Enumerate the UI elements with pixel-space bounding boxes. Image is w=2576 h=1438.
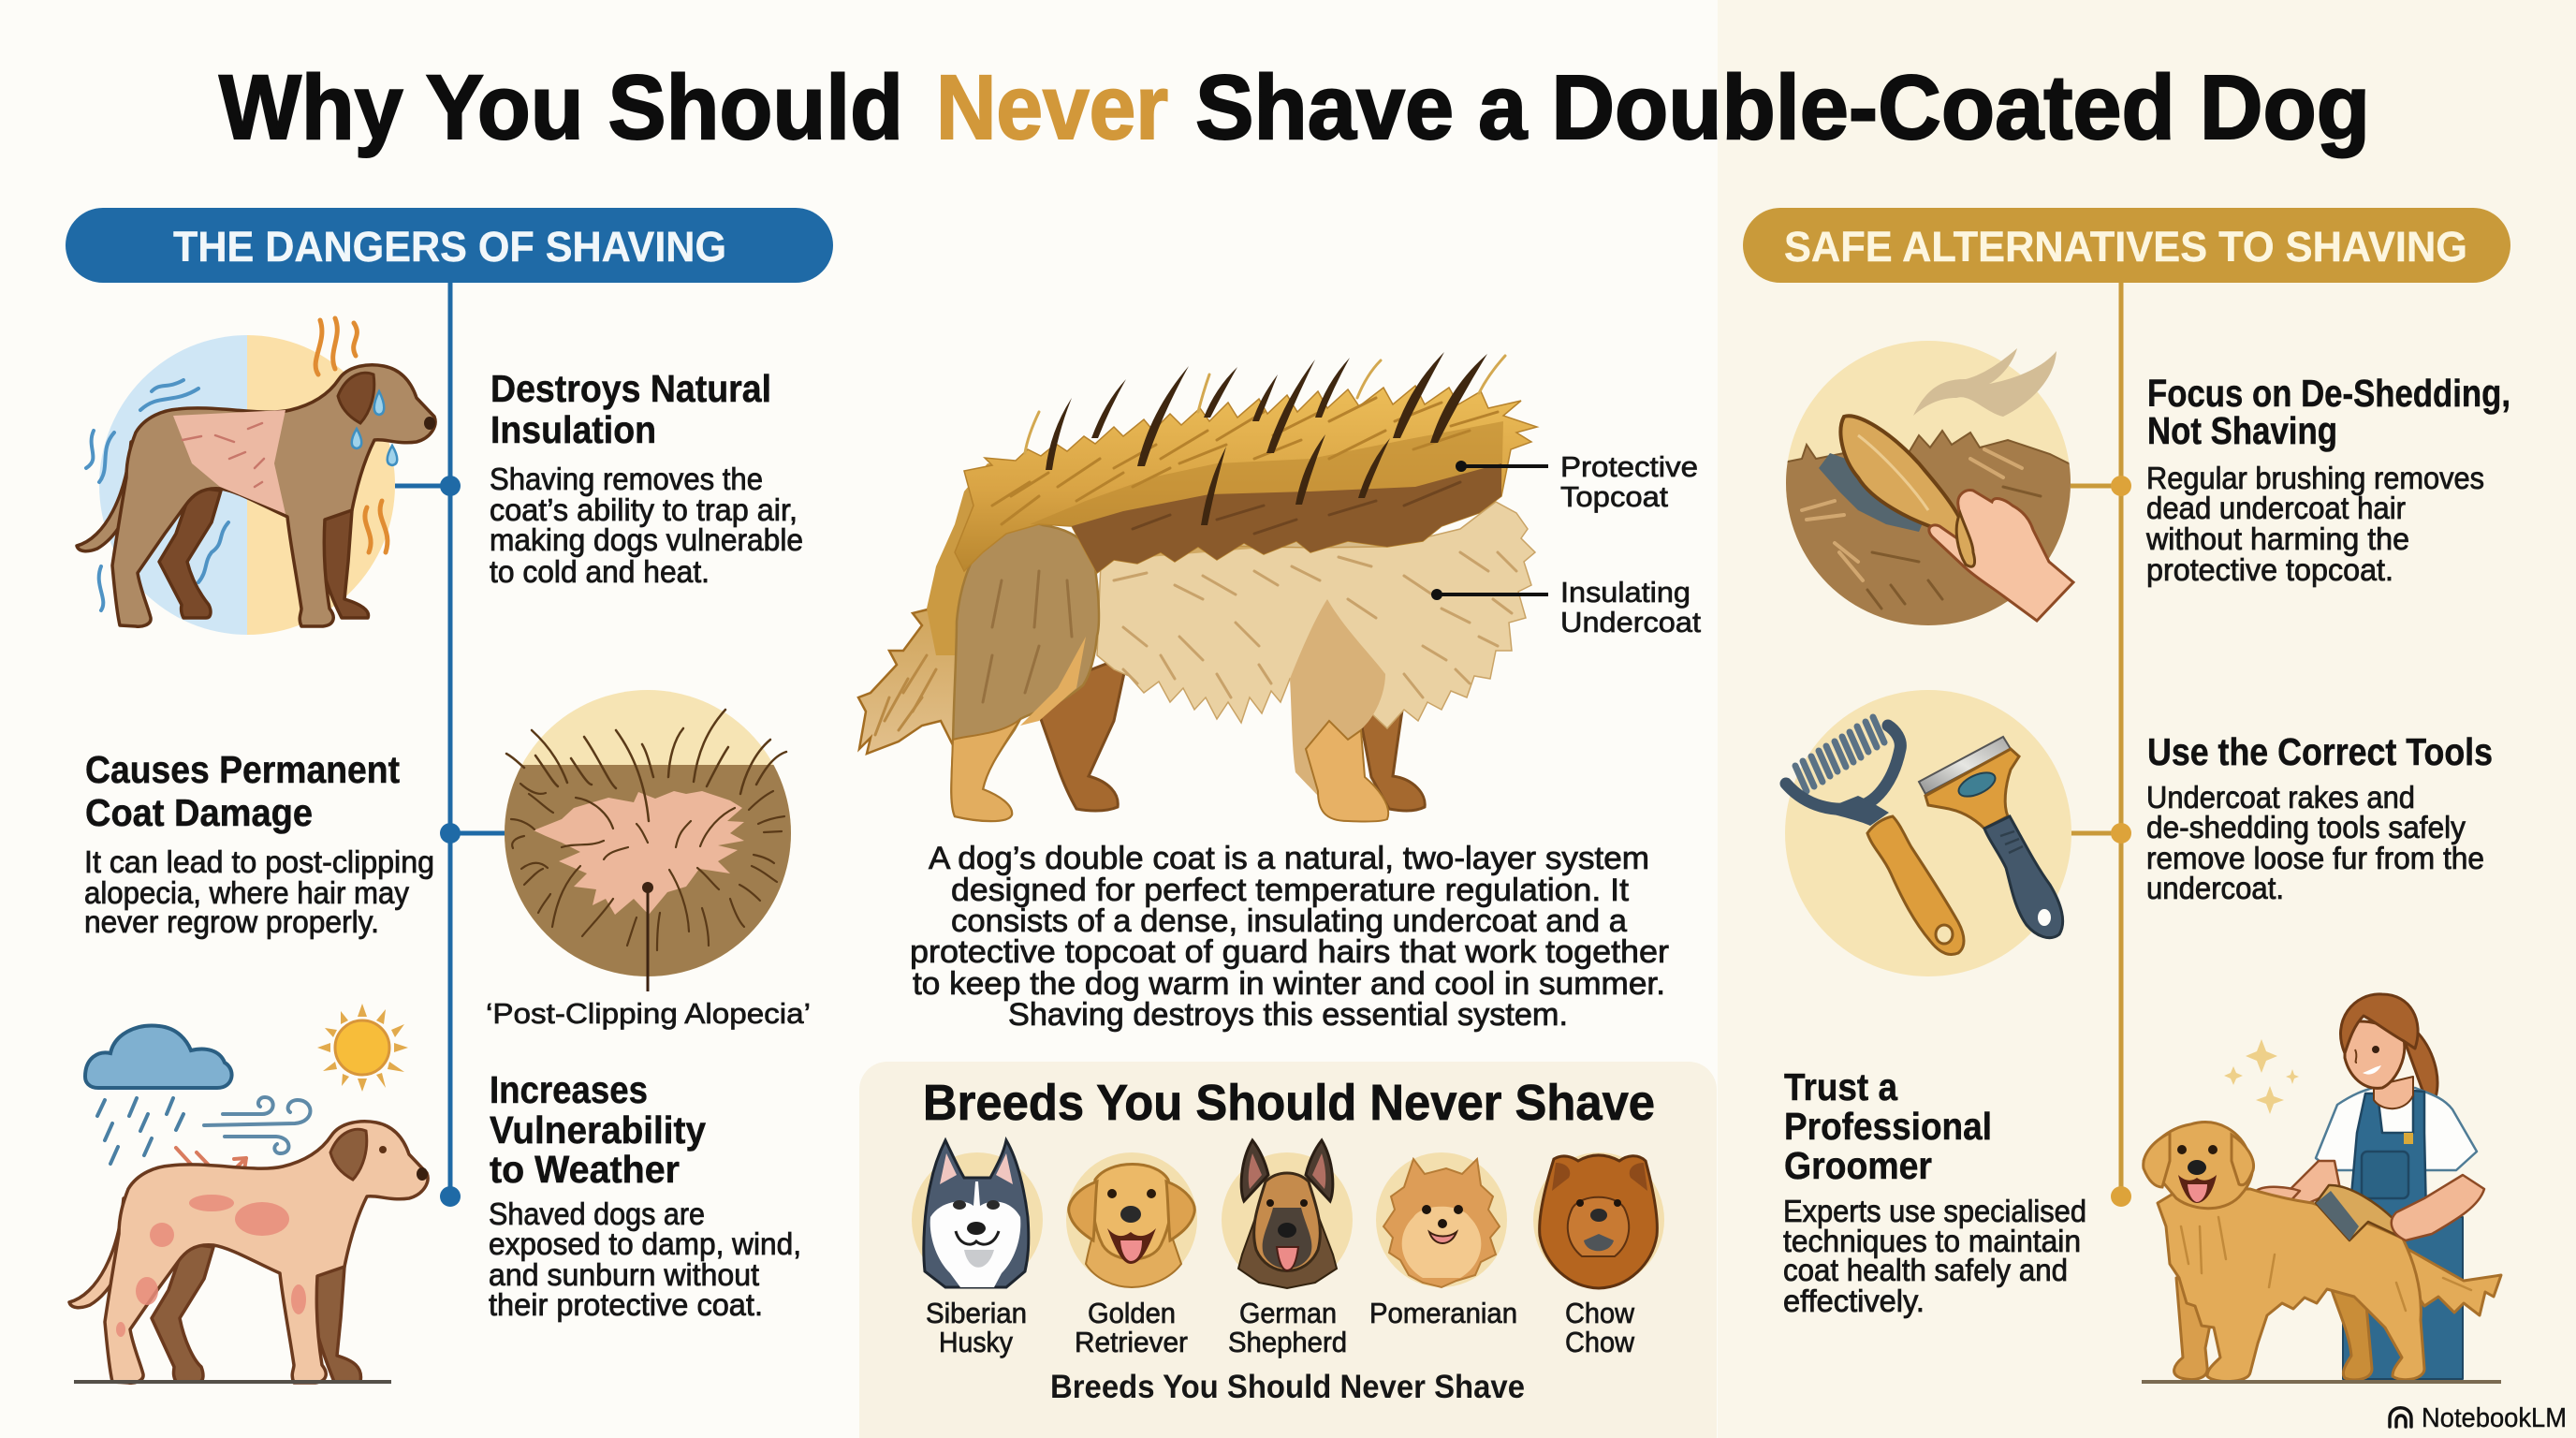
breed labels: Retriever	[1075, 1326, 1188, 1358]
text block: increases vulnerability to weather: Increases	[490, 1068, 648, 1111]
text block: destroys natural insulation: coat’s ability to trap air,	[490, 492, 798, 527]
text block: double coat description: consists of a dense, insulating undercoat and a	[951, 903, 1627, 939]
text block: increases vulnerability to weather: their protective coat.	[489, 1287, 763, 1322]
text block: use the correct tools: Undercoat rakes and	[2146, 780, 2415, 814]
text block: double coat description: protective topcoat of guard hairs that work together	[910, 934, 1669, 970]
title: Shave a Double-Coated Dog	[1195, 56, 2370, 158]
golden retriever	[2144, 1123, 2501, 1382]
ground line	[74, 1380, 391, 1384]
panel: the dangers of shaving	[66, 208, 833, 1384]
text block: destroys natural insulation: making dogs vulnerable	[490, 522, 803, 557]
icon: brushing fur	[1778, 341, 2078, 637]
text block: increases vulnerability to weather: to Weather	[490, 1148, 680, 1191]
text block: destroys natural insulation: Destroys Natural	[490, 367, 771, 410]
breed labels: German	[1239, 1297, 1337, 1329]
heading: breeds: Breeds You Should Never Shave	[923, 1075, 1655, 1131]
brush handle	[1840, 416, 1973, 555]
breed labels: Golden	[1088, 1297, 1176, 1329]
text block: use the correct tools: Use the Correct Tools	[2147, 730, 2493, 773]
callout: protective topcoat: Protective	[1560, 450, 1698, 483]
text block: double coat description: to keep the dog warm in winter and cool in summer.	[913, 966, 1665, 1002]
rear flank	[927, 463, 1072, 655]
breed labels: Shepherd	[1228, 1326, 1347, 1358]
heading pill: dangers: THE DANGERS OF SHAVING	[173, 223, 726, 271]
text block: causes permanent coat damage	[84, 748, 434, 939]
brush and hand	[2316, 1175, 2484, 1240]
callout: insulating undercoat: Insulating	[1560, 576, 1690, 609]
text block: use the correct tools: de-shedding tools safely	[2146, 810, 2466, 844]
text block: trust a professional groomer: techniques to maintain	[1783, 1224, 2081, 1258]
text block: destroys natural insulation: to cold and heat.	[490, 554, 710, 589]
topcoat midtone band	[1030, 421, 1503, 571]
text block: trust a professional groomer: effectively.	[1783, 1284, 1925, 1318]
undercoat rake	[1786, 717, 1964, 954]
text block: trust a professional groomer: Experts use specialised	[1783, 1194, 2086, 1228]
callout: insulating undercoat	[1431, 576, 1701, 638]
logo: NotebookLM: NotebookLM	[2422, 1403, 2567, 1433]
text block: destroys natural insulation	[490, 367, 803, 589]
text block: trust a professional groomer	[1783, 1065, 2086, 1318]
title: Why You Should	[219, 56, 903, 158]
icon: rain drops	[97, 1098, 183, 1164]
text block: increases vulnerability to weather: exposed to damp, wind,	[489, 1226, 801, 1261]
de-shedding tool	[1919, 737, 2063, 938]
text block: focus on de-shedding: dead undercoat hair	[2146, 491, 2406, 525]
icon: sun rays on skin	[176, 1148, 246, 1181]
bristles	[1819, 453, 1928, 532]
topcoat layer	[955, 386, 1537, 573]
topcoat shadow band	[1072, 463, 1501, 573]
front near leg	[1290, 599, 1388, 822]
undercoat layer	[1097, 502, 1535, 728]
callout: protective topcoat: Topcoat	[1560, 480, 1668, 513]
text block: double coat description: A dog’s double coat is a natural, two-layer system	[929, 841, 1649, 876]
breed: golden retriever	[1066, 1152, 1197, 1287]
text block: focus on de-shedding: Regular brushing removes	[2146, 461, 2484, 495]
text block: increases vulnerability to weather: and sunburn without	[489, 1257, 759, 1292]
far hind leg	[1032, 655, 1128, 811]
heading pill: dangers	[66, 208, 833, 283]
text block: double coat description: Shaving destroys this essential system.	[1008, 997, 1568, 1033]
text block: focus on de-shedding	[2145, 372, 2510, 587]
text block: focus on de-shedding: Focus on De-Shedding,	[2147, 372, 2510, 415]
hand	[1929, 491, 2073, 621]
hind near leg and thigh	[951, 523, 1099, 821]
panel: safe alternatives to shaving	[1743, 208, 2567, 1433]
text block: destroys natural insulation: Insulation	[490, 408, 656, 451]
sparkles	[2224, 1039, 2299, 1114]
label: post-clipping alopecia: ‘Post-Clipping Alopecia’	[486, 997, 811, 1030]
text block: focus on de-shedding: without harming the	[2145, 521, 2409, 556]
text block: focus on de-shedding: protective topcoat.	[2146, 552, 2393, 587]
icon: sun	[317, 1004, 408, 1092]
heading pill: alternatives: SAFE ALTERNATIVES TO SHAVING	[1784, 223, 2467, 271]
text block: trust a professional groomer: Professional	[1784, 1105, 1992, 1148]
text block: double coat description: designed for perfect temperature regulation. It	[951, 873, 1630, 908]
guard hairs	[1046, 352, 1487, 525]
text block: causes permanent coat damage: alopecia, where hair may	[84, 875, 409, 910]
text block: use the correct tools: remove loose fur from the	[2146, 841, 2484, 875]
text block: trust a professional groomer: Groomer	[1784, 1144, 1932, 1187]
title	[219, 56, 2370, 158]
text block: causes permanent coat damage: Coat Damage	[85, 791, 313, 834]
far front leg	[1357, 697, 1425, 811]
icon: grooming tools	[1785, 690, 2071, 976]
timeline: dangers	[395, 283, 506, 1207]
icon: post-clipping alopecia skin patch	[496, 690, 796, 991]
icon: dog exposed to weather	[69, 1004, 428, 1384]
text block: increases vulnerability to weather: Vulnerability	[490, 1108, 706, 1152]
illustration: shaved dog	[69, 1122, 428, 1383]
groomer	[2256, 994, 2477, 1379]
title: Never	[936, 56, 1168, 158]
illustration: groomer with golden retriever	[2142, 994, 2501, 1384]
text block: causes permanent coat damage: never regrow properly.	[84, 904, 379, 939]
callout: protective topcoat	[1456, 450, 1698, 513]
heading pill: alternatives	[1743, 208, 2510, 283]
panel: breeds you should never shave	[859, 1062, 1717, 1438]
ground line	[2142, 1380, 2501, 1384]
breed labels: Siberian	[926, 1297, 1027, 1329]
breed: chow chow	[1533, 1152, 1664, 1288]
text block: double coat description	[910, 841, 1669, 1033]
tail	[858, 552, 978, 754]
text block: increases vulnerability to weather: Shaved dogs are	[489, 1196, 705, 1231]
breed labels	[926, 1297, 1635, 1358]
timeline: alternatives	[2071, 283, 2131, 1207]
breed: german shepherd	[1222, 1140, 1353, 1288]
callout line: alopecia pointer	[642, 882, 653, 991]
breed labels: Pomeranian	[1369, 1297, 1517, 1329]
text block: increases vulnerability to weather	[489, 1068, 801, 1322]
text block: causes permanent coat damage: Causes Permanent	[85, 748, 400, 791]
text block: trust a professional groomer: Trust a	[1784, 1065, 1898, 1108]
loose fur	[1913, 348, 2056, 417]
icon: dog shivering and overheating	[77, 318, 435, 635]
callout: insulating undercoat: Undercoat	[1560, 606, 1701, 638]
breed labels: Chow	[1565, 1297, 1635, 1329]
text block: causes permanent coat damage: It can lead to post-clipping	[84, 844, 434, 879]
breed labels: Husky	[939, 1326, 1013, 1358]
icon: rain cloud	[85, 1026, 232, 1088]
panel: double coat diagram	[858, 352, 1701, 1033]
text block: trust a professional groomer: coat health safely and	[1783, 1253, 2068, 1287]
breed labels: Chow	[1565, 1326, 1635, 1358]
illustration: double-coated dog	[858, 352, 1537, 822]
breed: siberian husky	[912, 1140, 1043, 1287]
text block: use the correct tools	[2146, 730, 2493, 905]
text block: focus on de-shedding: Not Shaving	[2147, 409, 2337, 452]
text block: destroys natural insulation: Shaving removes the	[490, 462, 763, 496]
icon: wind	[204, 1097, 311, 1153]
breed: pomeranian	[1376, 1152, 1507, 1287]
caption: breeds: Breeds You Should Never Shave	[1050, 1369, 1525, 1405]
text block: use the correct tools: undercoat.	[2146, 871, 2284, 905]
